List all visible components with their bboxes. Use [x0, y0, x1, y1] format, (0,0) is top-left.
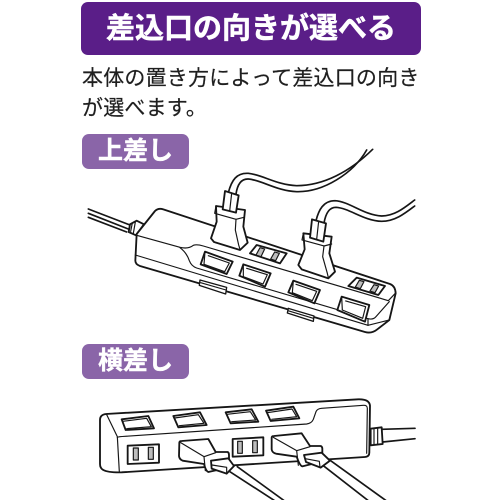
plug 1 cord — [228, 149, 373, 194]
strip body — [100, 399, 370, 472]
switch 2 — [239, 264, 271, 287]
outlet 2 — [233, 437, 263, 457]
outlet 2 — [348, 278, 385, 295]
outlet 1 — [128, 444, 159, 464]
plug 1 — [179, 439, 234, 474]
description text: が選べます。 — [82, 97, 207, 120]
plug 1 — [211, 191, 248, 250]
plug 2 cord — [323, 461, 388, 500]
switch 1 — [201, 252, 233, 274]
title banner: 差込口の向きが選べる — [106, 13, 396, 45]
illustration: power strip with plugs on side — [100, 399, 415, 500]
strip body — [135, 209, 396, 333]
plug 2 — [272, 433, 330, 468]
switch 1 — [122, 416, 154, 430]
switch 4 — [337, 297, 369, 322]
plug 1 cord — [228, 467, 286, 500]
label: side insertion: 横差し — [98, 347, 173, 375]
title banner — [81, 2, 421, 55]
description text — [82, 67, 420, 120]
supply cord — [371, 427, 415, 445]
label: top insertion — [82, 134, 189, 169]
switch 2 — [173, 412, 207, 427]
plug 2 — [298, 219, 335, 278]
edge tabs — [199, 280, 314, 321]
supply cord — [88, 209, 144, 235]
switch 3 — [226, 409, 258, 423]
illustration: power strip with plugs on top — [88, 149, 415, 333]
label: top insertion: 上差し — [98, 137, 173, 165]
switch 3 — [288, 281, 320, 303]
outlet 1 — [250, 245, 287, 263]
label: side insertion — [82, 344, 189, 379]
switch 4 — [266, 407, 299, 421]
plug 2 cord — [316, 200, 415, 223]
description text: 本体の置き方によって差込口の向き — [82, 67, 420, 90]
